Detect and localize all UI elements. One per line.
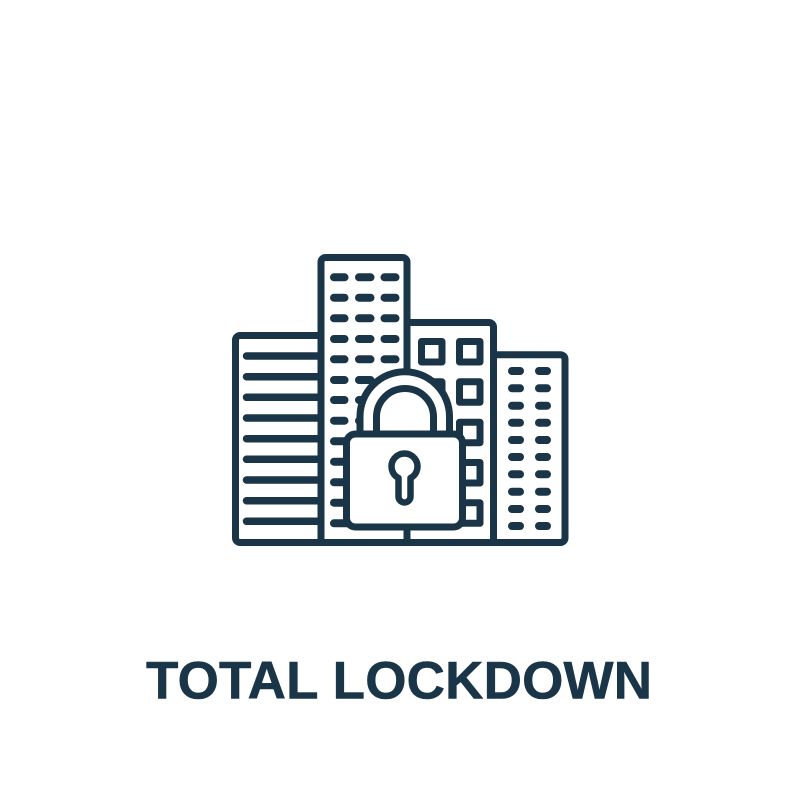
padlock inner shackle: [376, 388, 434, 434]
lock post connecting to ground: [404, 527, 410, 542]
right building: [321, 355, 565, 542]
keyhole: [391, 453, 418, 502]
padlock body: [346, 434, 462, 527]
padlock outer shackle: [360, 372, 450, 434]
padlock: [346, 372, 462, 542]
tall central tower: [321, 258, 407, 542]
title: TOTAL LOCKDOWN: [146, 652, 652, 710]
icon: city buildings with padlock: [236, 258, 565, 542]
middle building with square windows: [407, 322, 494, 542]
left building: [236, 336, 321, 542]
